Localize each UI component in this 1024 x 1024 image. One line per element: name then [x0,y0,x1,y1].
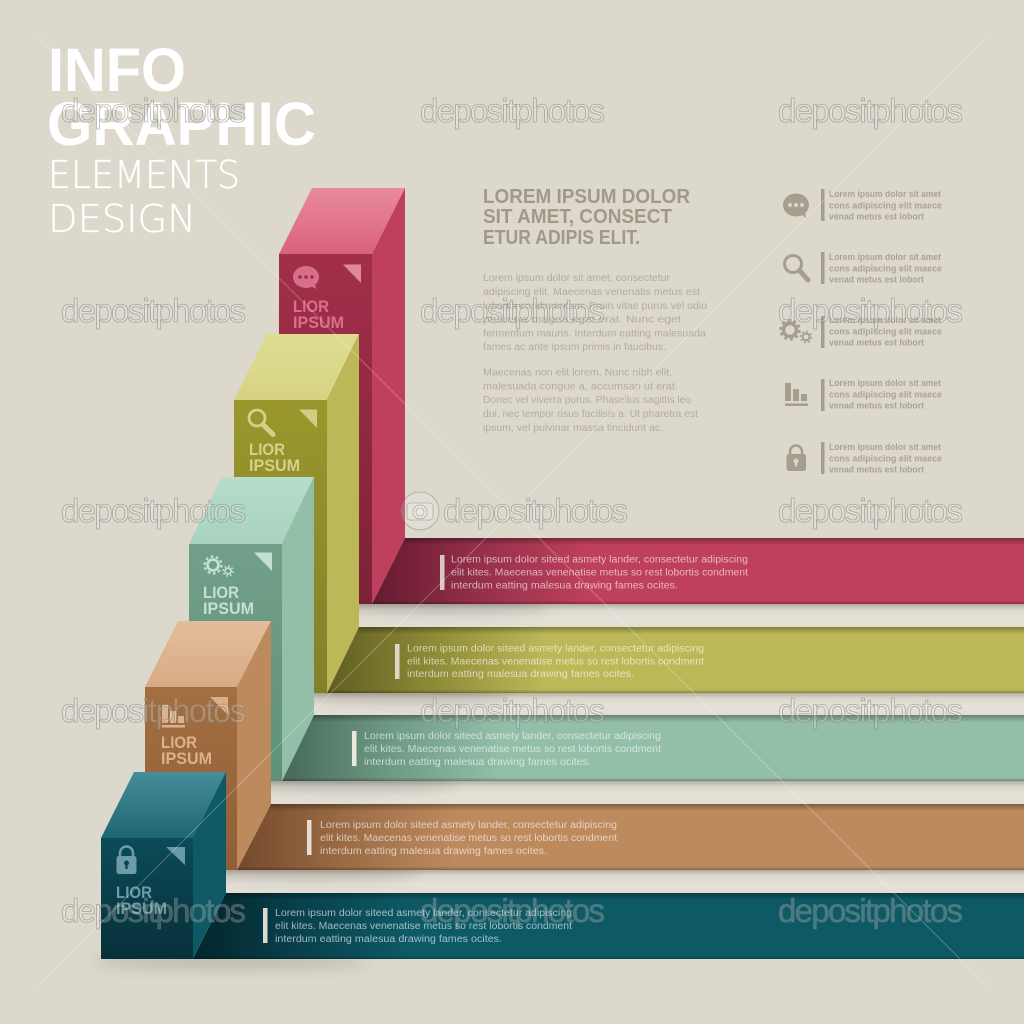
teal block: IPSUM [116,900,167,918]
watermarks: depositphotos [61,92,246,129]
body text block: malesuada congue a, accumsan ut erat. [483,380,678,392]
panel: side list [780,189,942,474]
red block: LIOR [293,298,329,316]
watermarks: depositphotos [778,292,963,329]
list item: lock: cons adipiscing elit maece [829,454,942,464]
teal ribbon: Lorem ipsum dolor siteed asmety lander, consectetur adipiscing [275,908,572,919]
body text block: fermentum mauris. Interdum eatting malesuada [483,328,706,340]
green ribbon: Lorem ipsum dolor siteed asmety lander, consectetur adipiscing [364,731,661,742]
step 5: teal [101,772,1024,959]
watermarks: depositphotos [443,492,628,529]
teal block [101,772,226,959]
watermarks: depositphotos [61,492,246,529]
step 2: olive [234,334,1024,693]
olive ribbon [327,627,1024,693]
watermarks: depositphotos [61,292,246,329]
watermarks: depositphotos [420,92,605,129]
green block: IPSUM [203,600,254,618]
heading: lorem ipsum: ETUR ADIPIS ELIT. [483,226,640,249]
list item: lock: Lorem ipsum dolor sit amet [829,442,941,452]
body text block: ipsum, vel pulvinar massa tincidunt ac. [483,422,663,434]
watermarks: depositphotos [778,892,963,929]
list item: search: cons adipiscing elit maece [829,264,942,274]
body text block [483,272,707,434]
green ribbon: interdum eatting malesua drawing fames ocites. [364,757,591,768]
olive block [234,334,359,693]
green ribbon: elit kites. Maecenas venenatise metus so rest lobortis condment [364,744,661,755]
body text block: pharetra magna eget erat. Nunc eget [483,314,681,326]
body text block: Donec vel viverra purus. Phasellus sagittis leo [483,394,691,406]
teal ribbon [193,893,1024,959]
tan block: LIOR [161,734,197,752]
body text block: adipiscing elit. Maecenas venenatis metus est [483,286,700,298]
watermarks: depositphotos [778,492,963,529]
title: INFO [48,36,186,104]
title: GRAPHIC [47,90,316,158]
list item: chat: cons adipiscing elit maece [829,200,942,210]
list item: search: venad metus est lobort [829,274,924,284]
list item: chart: venad metus est lobort [829,400,924,410]
red ribbon: elit kites. Maecenas venenatise metus so rest lobortis condment [451,568,748,578]
green block [189,477,314,781]
body text block: fames ac ante ipsum primis in faucibus. [483,341,666,353]
shadow under bottom block [90,956,370,968]
heading: lorem ipsum: LOREM IPSUM DOLOR [483,185,690,208]
list item: gears: Lorem ipsum dolor sit amet [829,315,941,325]
teal block: LIOR [116,884,152,902]
title: ELEMENTS [48,153,240,197]
watermarks: depositphotos [420,692,605,729]
list item: lock [786,442,942,474]
olive ribbon: elit kites. Maecenas venenatise metus so rest lobortis condment [407,656,704,668]
olive block: LIOR [249,441,285,459]
body text block: Maecenas non elit lorem. Nunc nibh elit, [483,366,672,378]
body text block: dui, nec tempor risus facilisis a. Ut pharetra est [483,408,698,420]
heading: lorem ipsum: SIT AMET, CONSECT [483,205,672,228]
olive block: IPSUM [249,457,300,475]
step 3: green [189,477,1024,781]
red ribbon: Lorem ipsum dolor siteed asmety lander, consectetur adipiscing [451,554,748,566]
heading: lorem ipsum [483,185,690,249]
teal ribbon: elit kites. Maecenas venenatise metus so rest lobortis condment [275,921,572,932]
list item: chart: Lorem ipsum dolor sit amet [829,378,941,388]
red block: IPSUM [293,314,344,332]
tan ribbon [237,804,1024,870]
list item: lock: venad metus est lobort [829,464,924,474]
list item: search [784,252,942,284]
list item: gears: venad metus est lobort [829,338,924,348]
body text block: Lorem ipsum dolor sit amet, consectetur [483,272,670,284]
red ribbon: interdum eatting malesua drawing fames ocites. [451,580,678,592]
tan block [145,621,271,870]
tan block: IPSUM [161,750,212,768]
watermarks [61,92,963,929]
step 1: red [279,188,1024,604]
list item: gears [780,315,942,348]
list item: chart: cons adipiscing elit maece [829,390,942,400]
body text block: lobortis condimentum. Proin vitae purus vel odio [483,300,707,312]
watermarks: depositphotos [778,92,963,129]
step 4: tan [145,621,1024,870]
list item: chart [785,378,942,411]
watermarks: depositphotos [61,692,246,729]
list item: gears: cons adipiscing elit maece [829,326,942,336]
list item: chat: venad metus est lobort [829,212,924,222]
list item: chat [783,189,942,222]
red block [279,188,405,604]
title: DESIGN [48,197,196,241]
title [47,36,316,241]
list item: chat: Lorem ipsum dolor sit amet [829,189,941,199]
red ribbon [372,538,1024,604]
list item: search: Lorem ipsum dolor sit amet [829,252,941,262]
green block: LIOR [203,584,239,602]
watermarks: depositphotos [420,292,605,329]
teal ribbon: interdum eatting malesua drawing fames ocites. [275,934,502,945]
tan ribbon: interdum eatting malesua drawing fames ocites. [320,846,547,857]
tan ribbon: Lorem ipsum dolor siteed asmety lander, consectetur adipiscing [320,820,617,831]
watermarks: depositphotos [61,892,246,929]
tan ribbon: elit kites. Maecenas venenatise metus so rest lobortis condment [320,833,617,844]
watermarks: depositphotos [778,692,963,729]
olive ribbon: interdum eatting malesua drawing fames ocites. [407,669,634,680]
olive ribbon: Lorem ipsum dolor siteed asmety lander, consectetur adipiscing [407,644,704,654]
watermarks: depositphotos [420,892,605,929]
green ribbon [282,715,1024,781]
gap shadows [190,597,1024,893]
